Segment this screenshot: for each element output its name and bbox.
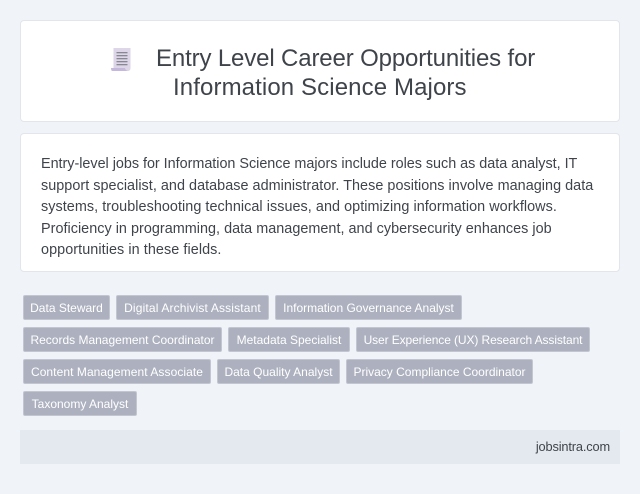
tag: Digital Archivist Assistant — [124, 301, 261, 315]
tag — [23, 327, 222, 352]
tag — [275, 295, 462, 320]
description text — [41, 156, 594, 258]
tag: Data Steward — [30, 301, 103, 315]
tag: Data Quality Analyst — [224, 365, 333, 379]
tag — [228, 327, 350, 352]
tag: Metadata Specialist — [237, 333, 341, 347]
tag — [116, 295, 269, 320]
icon: document scroll — [111, 48, 130, 71]
tag: Information Governance Analyst — [283, 301, 454, 315]
tag — [23, 391, 137, 416]
tag: Taxonomy Analyst — [32, 397, 128, 411]
tag — [356, 327, 590, 352]
tag — [346, 359, 533, 384]
tag: Content Management Associate — [31, 365, 203, 379]
tags group — [23, 295, 590, 416]
tag: Privacy Compliance Coordinator — [353, 365, 526, 379]
tag: User Experience (UX) Research Assistant — [364, 333, 582, 347]
tag — [23, 359, 211, 384]
panel: description — [20, 133, 620, 272]
description text: Entry-level jobs for Information Science majors include roles such as data analyst, IT — [41, 156, 577, 172]
tag: Records Management Coordinator — [30, 333, 215, 347]
description text: Proficiency in programming, data management, and cybersecurity enhances job — [41, 221, 552, 237]
footer source text: jobsintra.com — [536, 439, 610, 454]
tag — [23, 295, 110, 320]
tag — [217, 359, 340, 384]
description text: opportunities in these fields. — [41, 242, 222, 258]
footer bar — [20, 430, 620, 464]
description text: support specialist, and database administrator. These positions involve managing data — [41, 178, 593, 194]
title line 2: Information Science Majors — [173, 74, 467, 101]
description text: systems, troubleshooting technical issues, and optimizing information workflows. — [41, 199, 557, 215]
panel: title card — [20, 20, 620, 122]
title line 1: Entry Level Career Opportunities for — [156, 45, 535, 72]
